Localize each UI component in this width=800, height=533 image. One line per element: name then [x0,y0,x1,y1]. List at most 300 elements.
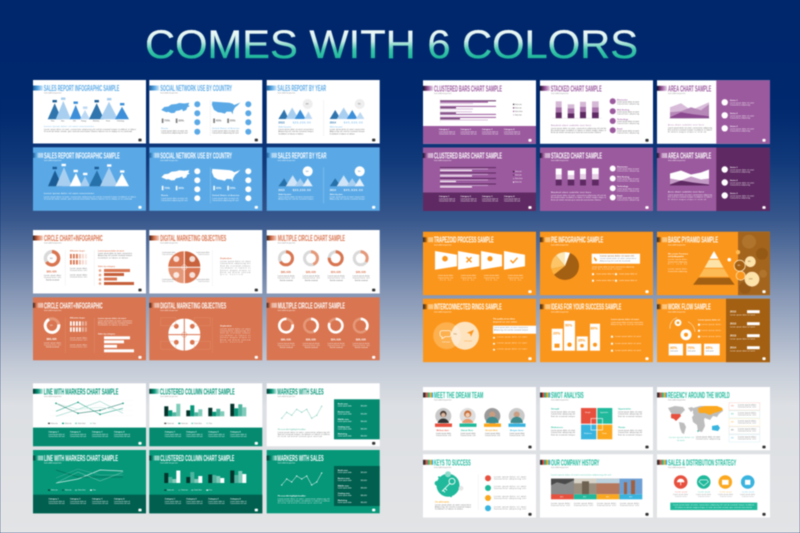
side panel: Lorem ipsum dolor [338,494,352,497]
bottom panel [149,428,262,446]
icon list: Web Hosting [617,176,630,178]
timeline bars: 2014 [583,496,586,498]
side panel: North area [338,402,349,405]
world map [668,406,723,434]
icon list: Lorem ipsum dolor sit amet [617,120,640,123]
bottom panel: Consectetur elit sed [48,435,65,438]
paragraph: Adipiscing elit sed do eiusmod tempor [98,321,132,324]
percent blobs [303,99,365,109]
circle values [738,261,753,281]
people icons: Consectetur elit [70,345,88,348]
side panel: 2013 [730,322,737,326]
country text: Consectetur adipiscing elit sed [212,199,238,202]
text block [551,124,607,134]
values and text: Sed do eiusmod [355,280,368,282]
values and text: Lorem ipsum dolor [353,342,370,345]
values and text: Lorem ipsum dolor [328,342,345,345]
gender stats: 70% [164,118,170,122]
paragraph: Explanation [220,257,232,260]
bottom panel: Category 4 [504,128,515,131]
triangle chart [48,164,129,186]
line chart [281,406,322,419]
slide: sales report infographic, white [33,80,146,144]
text block: Ut enim ad minim veniam quis nostrud [278,435,322,438]
logo [255,442,258,445]
slide: social network use by country, blue: Insert subtitle text goes here [160,159,178,162]
map caption: sit amet [677,439,685,442]
logo [528,446,532,448]
timeline bars: 2016 [629,496,632,498]
icon list: Consectetur adipiscing elit [494,497,527,500]
timeline bars [551,494,642,499]
column chart [164,470,246,483]
side panel: $40,000 [361,495,367,497]
bottom panel: Lorem ipsum dolor sit [208,500,225,503]
text block [668,253,688,273]
text block [44,192,136,200]
logo [762,290,766,293]
trapezoids [435,251,525,270]
text: Consectetur elit [70,276,88,279]
text blocks: Lorem ipsum dolor sit amet consectetur [330,128,365,131]
swot grid [581,408,612,439]
text blocks: Adipiscing elit sed do eiusmod tempor [278,130,314,133]
slide: stacked chart, purple [540,148,653,211]
list: Lorem ipsum dolor [701,323,721,326]
donut value and text: Sed do eiusmod [46,347,59,349]
side panel: Eastern area [338,410,351,413]
slide: clustered bars, white: Insert subtitle text goes here [434,92,452,95]
slide: our company history [540,454,653,518]
slide: multiple circle chart, white: Insert subtitle text goes here [278,242,295,245]
bottom panel: Consectetur elit sed [504,132,520,135]
side panel: Lorem ipsum dolor [338,427,352,430]
slide: digital marketing objectives, coral: Insert subtitle text goes here [160,309,178,312]
bottom panel: Category 3 [482,195,493,198]
swot grid: Strength [585,411,590,414]
callout box [592,254,640,264]
area chart [669,102,710,118]
icon list: Lorem ipsum dolor sit amet [494,505,527,508]
side panel: Series 1 [730,100,739,102]
text blocks: Lorem ipsum dolor sit amet consectetur [278,195,314,198]
slide: keys to success: KEYS TO SUCCESS [434,458,471,467]
slide: line with markers, white [33,383,146,446]
logo [645,357,649,360]
values and text: $54,426 [331,270,341,274]
side panel: $10,000 [361,480,367,482]
horizontal bars [104,336,134,352]
bottom panel: Consectetur elit sed [114,502,130,505]
slide: clustered bars, purple: CLUSTERED BARS CHART SAMPLE [434,152,502,160]
country text: United States of America [212,127,240,130]
text block: Enim ad minim veniam quis nostrud exercitation ullamco [551,198,601,201]
list: Lorem ipsum dolor sit [596,273,615,276]
donut charts [278,318,367,333]
text block: Lorem ipsum dolor sit amet consectetur [494,326,528,329]
names and bios: Melissa Jane [436,430,450,432]
logo [762,357,766,360]
side panel: Lorem ipsum dolor sit amet [730,194,755,198]
step text [438,274,524,282]
names and bios: Brenda Mark [486,430,499,432]
circle values: 100% [749,279,753,281]
bottom panel: Category 1 [439,195,450,198]
step text: Consectetur elit [484,276,500,279]
step text: Lorem ipsum dolor [461,274,476,277]
left text [551,408,576,436]
slide: social network use by country, blue [149,147,262,211]
logo [372,206,375,209]
stat boxes: Lorem ipsum [688,351,696,353]
legend: Series two [181,422,188,425]
text block: Lorem ipsum dolor sit amet, consectetur adipiscing elit sed do eiusmod tempor incididunt ut labore [44,128,136,131]
stat boxes: Lorem ipsum [670,351,679,353]
country text [161,194,240,202]
bottom panel: Consectetur elit sed [186,502,202,505]
legend: Series two [65,422,72,425]
title: COMES WITH 6 COLORS [145,23,638,67]
side panel: Consectetur adipiscing [730,196,750,200]
slide: sales report infographic, blue [33,147,146,211]
legend: Series one [167,490,174,492]
map: russia [161,103,190,113]
paragraph: Lorem ipsum dolor sit amet, consectetur [98,319,132,322]
values and text: Sed do eiusmod [305,347,318,349]
donut value and text: Consectetur elit [44,276,62,279]
icon list: Lorem ipsum dolor sit amet [617,130,640,133]
paragraph: Incididunt ut labore et dolore [98,324,128,327]
text block: Elit sed do eiusmod tempor incididunt ut labore [668,196,712,199]
slide: sales report by year, white: SALES REPORT BY YEAR [277,84,326,93]
logo [762,513,766,516]
text blocks [278,126,365,135]
text block: Lorem ipsum dolor sit amet [497,348,528,351]
text block: Ut enim ad minim veniam, quis nostrud exercitation ullamco laboris nisi ut aliquip ex ea commodo [44,130,132,133]
slide: swot analysis [540,387,653,450]
triangle chart: Forum [106,120,111,122]
slide: area chart, white [657,80,770,144]
legend: Series three [515,177,523,180]
values and text: Consectetur elit [303,277,320,280]
side panel: $40,000 [361,428,367,430]
column text [551,502,640,507]
step text: Lorem ipsum dolor [508,274,523,277]
icon list: Lorem ipsum dolor sit amet [494,495,527,498]
slide: work flow, orange: WORK FLOW SAMPLE [668,303,711,312]
slide: multiple circle chart, white [267,230,380,294]
slide: area chart, purple: Insert subtitle text goes here [668,159,686,162]
text block: Consectetur adipiscing [668,260,687,263]
names and bios: Lorem ipsum dolor [510,432,525,435]
bottom panel: Category 1 [165,430,176,433]
paragraph [220,324,251,344]
pie chart [551,252,579,280]
slide: stacked chart, purple: STACKED CHART SAMPLE [551,152,602,160]
icon list: Technology [617,119,629,121]
logo [255,509,258,511]
legend: Four [209,423,213,425]
bottom panel: Consectetur elit sed [208,502,224,505]
values and text: Lorem ipsum dolor [353,274,370,278]
text block: Lorem ipsum dolor sit amet [497,336,528,339]
text block [435,501,471,511]
country text [161,127,240,135]
slide: area chart, purple [657,148,770,211]
region boxes: Lorem ipsum dolor [738,412,756,414]
slide: sales report infographic, blue: Insert subtitle text goes here [44,159,62,162]
paragraph: Incididunt ut labore et [220,334,251,337]
triangles 2013 [278,108,312,119]
side panel: Lorem ipsum dolor [338,479,352,482]
text blocks: Incididunt ut labore et dolore [278,132,303,135]
slide: pie infographic, orange [540,232,653,295]
paragraph: Dolore magna aliqua ut [220,336,251,339]
callout box: Adipiscing elit sed do eiusmod [600,259,630,262]
yearly values [278,188,363,192]
right text: Opportunities [618,408,632,410]
slide: stacked chart, purple: Insert subtitle text goes here [551,159,569,162]
icon list: Lorem ipsum dolor sit amet [494,485,527,488]
slide: digital marketing objectives, coral [149,297,262,360]
icon list: Email [617,128,623,130]
label boxes: Consectetur [162,253,174,256]
values and text: Consectetur elit [278,344,295,347]
yearly values: $23,230.00 [293,188,311,192]
side panel: Lorem ipsum dolor sit amet [730,338,756,341]
donut value and text: Lorem ipsum dolor [44,341,61,344]
logo [372,356,375,359]
paragraph: Enim ad minim veniam [220,339,251,341]
side panel: Lorem ipsum dolor [338,412,352,415]
icon list: Web Hosting [617,108,630,111]
side panel: Lorem ipsum dolor [338,471,352,474]
bottom panel: Category 1 [48,430,60,433]
bottom panel: Lorem ipsum dolor sit [504,130,521,133]
values and text: $26,426 [306,270,316,274]
bottom panel: Lorem ipsum dolor sit [114,500,131,503]
side panel [334,399,380,439]
stacked columns [556,168,599,186]
list: Lorem ipsum dolor sit [596,279,615,282]
slide: area chart, white: Insert subtitle text goes here [668,92,686,95]
timeline bars: 2013 [560,496,563,498]
values and text: Lorem ipsum dolor [303,274,320,278]
column text: Lorem ipsum dolor [574,502,593,505]
list: Lorem ipsum dolor [701,335,721,338]
slide: circle chart, white: CIRCLE CHART+INFOGRAPHIC [44,234,103,243]
icon captions: Lorem ipsum dolor [718,494,734,496]
slide: ideas for your success, orange: IDEAS FOR YOUR SUCCESS SAMPLE [551,303,622,312]
bar chart [440,167,496,188]
side panel: Lorem ipsum dolor sit amet [730,101,755,104]
slide: sales report by year, blue: Insert subtitle text goes here [278,159,295,162]
text block: Eiusmod tempor incididunt ut labore et dolore magna aliqua ut [551,196,607,199]
side panel: 2012 [730,310,737,314]
bottom panel: Category 3 [208,430,220,433]
column text: Lorem ipsum dolor [597,502,616,505]
bottom panel: Lorem ipsum dolor sit [48,433,65,436]
donut value and text: Sed do eiusmod [46,279,59,281]
icon captions: Consectetur [698,495,711,498]
bar values: 35% [578,339,586,343]
bottom panel: Lorem ipsum dolor sit [92,500,109,503]
percent blobs: 70% [358,171,361,173]
bottom panel: Category 2 [186,498,198,500]
icon list [610,98,640,134]
gears [670,318,695,340]
slide: clustered column, white: CLUSTERED COLUMN CHART SAMPLE [160,387,235,396]
triangle chart: Sales [61,120,65,122]
names and bios: Lorem ipsum dolor [460,432,476,435]
yearly values: 2013 [278,120,285,124]
side panel: Lorem ipsum dolor sit amet [730,127,755,130]
slide: digital marketing objectives, white: Insert subtitle text goes here [160,242,178,245]
text block [611,318,643,352]
donut chart [45,252,59,265]
slide: multiple circle chart, coral: MULTIPLE CIRCLE CHART SAMPLE [278,301,345,310]
icon captions: Consectetur [675,495,688,498]
bottom panel: Lorem ipsum dolor sit [70,500,87,503]
callout box: Lorem ipsum dolor sit amet consectetur [600,257,636,260]
bottom panel: Category 3 [482,128,493,131]
icon list [610,166,640,202]
paragraph: Consectetur adipiscing elit [220,329,251,332]
country text: Lorem ipsum dolor sit amet elit [161,197,188,200]
country text: Lorem ipsum dolor sit amet elit [212,197,239,200]
logo [762,206,766,209]
label boxes: Lorem ipsum dolor [162,279,176,281]
bottom panel: Category 3 [208,498,220,500]
legend: Series one [515,171,522,173]
photo strip [551,479,642,494]
country text: United States of America [212,194,240,197]
legend: Series four [515,114,522,116]
bottom panel: Category 4 [504,195,515,198]
left text: Lorem ipsum dolor sit amet [551,410,576,414]
bottom panel: Category 3 [92,498,103,500]
region boxes: Lorem ipsum dolor [738,428,756,430]
text block: Lorem ipsum dolor sit amet, consectetur adipiscing [668,126,712,129]
swot grid: Opportunities [600,411,609,414]
list: Lorem ipsum dolor sit [619,273,638,276]
legend: Series two [65,489,72,492]
map caption: Lorem ipsum dolor sit amet [696,436,721,438]
bar values [553,324,598,343]
side panel: Series 2 [730,113,739,115]
bottom panel: Category 1 [165,498,176,500]
names and bios: Consectetur elit [510,434,525,437]
slide: social network use by country, blue: SOCIAL NETWORK USE BY COUNTRY [160,151,232,160]
text [70,267,88,279]
slide: sales report infographic, white: Insert subtitle text goes here [44,92,62,95]
left text: Weaknesses [551,427,564,429]
text blocks: Adipiscing elit sed do eiusmod tempor [278,198,314,201]
slide: stacked chart, white: STACKED CHART SAMPLE [551,84,602,93]
slide: line with markers, teal [33,450,146,513]
bottom panel: Consectetur elit sed [460,200,477,202]
bottom panel [149,495,262,513]
legend: Series three [515,110,523,113]
bottom panel: Lorem ipsum dolor sit [186,500,203,503]
people icons: Lorem ipsum dolor [70,343,87,346]
text block: Sed do eiusmod tempor incididunt ut labore et dolore [278,500,330,502]
bottom panel: Category 4 [114,430,125,433]
values and text: Consectetur elit [353,344,370,347]
text block: Et dolore magna aliqua ut enim ad [668,198,706,201]
slide: ideas for your success, orange [540,299,653,362]
bottom panel: Consectetur elit sed [165,502,181,505]
column chart [164,404,246,416]
side panel: Marketing [338,432,348,435]
bottom panel: Consectetur elit sed [48,502,65,505]
bottom panel: Category 3 [92,430,103,433]
logo [138,509,142,511]
side panel: Lorem ipsum dolor [338,434,352,437]
side panel: Series 1 [730,167,739,169]
column text: Consectetur elit [597,504,617,507]
map: usa [212,102,240,114]
side panel: Series 3 [730,193,739,195]
donut value and text: Consectetur elit [44,343,62,346]
values and text: Sed do eiusmod [330,347,343,349]
paragraph [98,250,132,268]
slide: markers with sales, teal: MARKERS WITH SALES [277,454,324,463]
paragraph: Lorem ipsum dolor sit amet [220,327,251,330]
icon captions: Lorem ipsum [742,491,755,493]
values and text: $80,426 [281,270,291,274]
paragraph: Adipiscing elit sed do eiusmod tempor [98,254,132,257]
slide: digital marketing objectives, white [149,230,262,294]
text blocks: Sales by year [278,126,291,128]
gender stats: 55% [230,118,236,122]
icon captions: Lorem ipsum [720,491,732,493]
process icons [442,256,518,264]
side panel: Middle area [338,419,350,421]
column bars [552,321,600,351]
column text: Lorem ipsum dolor [551,502,570,505]
portraits [435,408,525,424]
text block: Lorem ipsum dolor sit amet [615,335,642,338]
side panel: $50,000 [361,435,367,437]
text blocks: Adipiscing elit sed do eiusmod tempor [330,198,365,201]
bottom panel [423,126,536,144]
list [592,266,638,282]
slide: sales report by year, blue [267,147,380,211]
text block: Area chart subtitle text here [668,123,705,126]
people icons: Effective buyer [70,317,85,320]
line chart [281,472,322,486]
text block: Lorem ipsum dolor sit amet [615,342,642,345]
bottom panel: Category 2 [460,128,472,131]
logo [762,446,766,448]
country text: Lorem ipsum dolor sit amet elit [161,130,188,132]
text block: Stacked chart subtitle text here [551,191,592,194]
values and text: $26,426 [306,337,316,341]
logo [372,289,375,291]
text block: Ut enim ad minim veniam quis nostrud [278,502,322,504]
callout box: Lorem ipsum dolor sit amet elit [600,255,634,258]
text block: Consectetur adipiscing [668,270,687,273]
triangle chart: Web [73,120,76,122]
text block: The quality of our ideas [493,318,516,321]
stat boxes [669,344,720,355]
bottom panel: Consectetur elit sed [439,200,455,202]
slide: multiple circle chart, coral: Insert subtitle text goes here [278,309,295,312]
text block: Elit sed do [668,263,687,266]
logo [645,513,649,516]
side panel: Lorem ipsum dolor sit amet [730,350,756,353]
